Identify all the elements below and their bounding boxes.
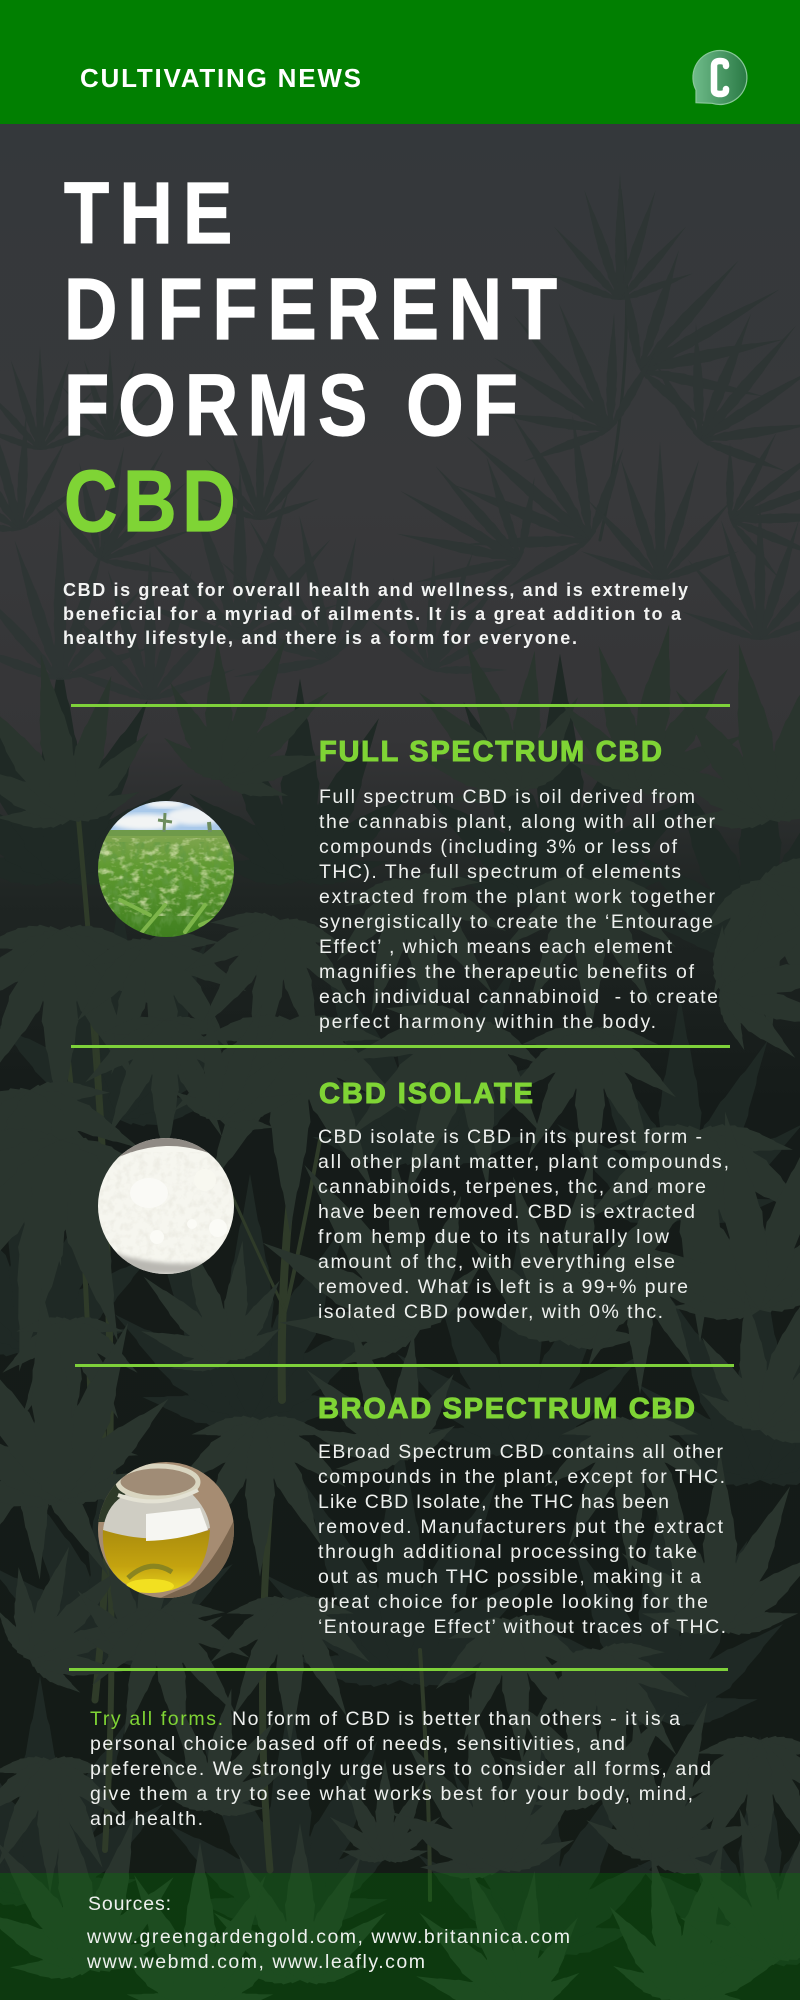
text: full spectrum description: extracted from the plant work together <box>319 886 716 908</box>
closing note: and health. <box>90 1808 203 1830</box>
text: isolate description: amount of thc, with everything else <box>318 1251 675 1273</box>
heading: broad spectrum: BROAD SPECTRUM CBD <box>318 1393 695 1425</box>
text: broad spectrum description: Like CBD Isolate, the THC has been <box>318 1491 669 1513</box>
text: isolate description: have been removed. CBD is extracted <box>318 1201 695 1223</box>
text: full spectrum description <box>319 786 718 1033</box>
footer band <box>0 1873 800 2000</box>
closing note: personal choice based off of needs, sensitivities, and <box>90 1733 625 1755</box>
section: CBD isolate <box>318 1078 729 1323</box>
header bar <box>0 0 800 124</box>
section: full spectrum CBD <box>319 736 718 1033</box>
heading: isolate: CBD ISOLATE <box>319 1078 533 1110</box>
closing note: give them a try to see what works best for your body, mind, <box>90 1783 693 1805</box>
main title: FORMS OF <box>64 357 518 454</box>
text: full spectrum description: perfect harmony within the body. <box>319 1011 656 1033</box>
text: full spectrum description: the cannabis plant, along with all other <box>319 811 716 833</box>
text: broad spectrum description: removed. Manufacturers put the extract <box>318 1516 724 1538</box>
text: broad spectrum description: through additional processing to take <box>318 1541 697 1563</box>
text: full spectrum description: each individual cannabinoid - to create <box>319 986 718 1008</box>
header title: CULTIVATING NEWS <box>80 63 361 93</box>
intro text: beneficial for a myriad of ailments. It is a great addition to a <box>63 604 682 624</box>
text: broad spectrum description: out as much THC possible, making it a <box>318 1566 701 1588</box>
photo: oil jar <box>98 1462 234 1598</box>
text: isolate description: all other plant matter, plant compounds, <box>318 1151 729 1173</box>
closing note: Try all forms. <box>90 1708 223 1730</box>
text: broad spectrum description: EBroad Spectrum CBD contains all other <box>318 1441 724 1463</box>
intro text <box>63 580 688 648</box>
text: broad spectrum description: compounds in the plant, except for THC. <box>318 1466 725 1488</box>
text: full spectrum description: synergistically to create the ‘Entourage <box>319 911 713 933</box>
closing note: preference. We strongly urge users to consider all forms, and <box>90 1758 711 1780</box>
photo: CBD isolate powder <box>98 1138 234 1274</box>
main title: THE <box>64 165 232 262</box>
intro text: CBD is great for overall health and wellness, and is extremely <box>63 580 688 600</box>
heading: full spectrum: FULL SPECTRUM CBD <box>319 736 662 768</box>
section: broad spectrum CBD <box>318 1393 726 1638</box>
text: full spectrum description: magnifies the therapeutic benefits of <box>319 961 695 983</box>
intro text: healthy lifestyle, and there is a form for everyone. <box>63 628 577 648</box>
photo: hemp field <box>98 800 234 938</box>
text: full spectrum description: Full spectrum CBD is oil derived from <box>319 786 695 808</box>
text: isolate description: removed. What is left is a 99+% pure <box>318 1276 688 1298</box>
text: broad spectrum description: ‘Entourage Effect’ without traces of THC. <box>318 1616 726 1638</box>
icon: Cultivating News logo <box>693 50 747 104</box>
sources label: Sources: <box>88 1893 171 1915</box>
sources list: www.greengardengold.com, www.britannica.com <box>86 1926 570 1948</box>
text: full spectrum description: compounds (including 3% or less of <box>319 836 678 858</box>
text: broad spectrum description <box>318 1441 726 1638</box>
sources list: www.webmd.com, www.leafly.com <box>86 1951 425 1973</box>
main title: CBD <box>64 453 236 550</box>
text: broad spectrum description: great choice for people looking for the <box>318 1591 708 1613</box>
closing note: No form of CBD is better than others - it is a <box>232 1708 680 1730</box>
closing note <box>90 1708 711 1830</box>
text: isolate description: CBD isolate is CBD in its purest form - <box>318 1126 702 1148</box>
text: isolate description: from hemp due to its naturally low <box>318 1226 670 1248</box>
text: isolate description <box>318 1126 729 1323</box>
sources list <box>86 1926 570 1973</box>
main title <box>64 165 557 550</box>
text: full spectrum description: THC). The full spectrum of elements <box>319 861 681 883</box>
text: isolate description: cannabinoids, terpenes, thc, and more <box>318 1176 706 1198</box>
main title: DIFFERENT <box>64 261 557 358</box>
text: isolate description: isolated CBD powder, with 0% thc. <box>318 1301 663 1323</box>
text: full spectrum description: Effect’ , which means each element <box>319 936 673 958</box>
